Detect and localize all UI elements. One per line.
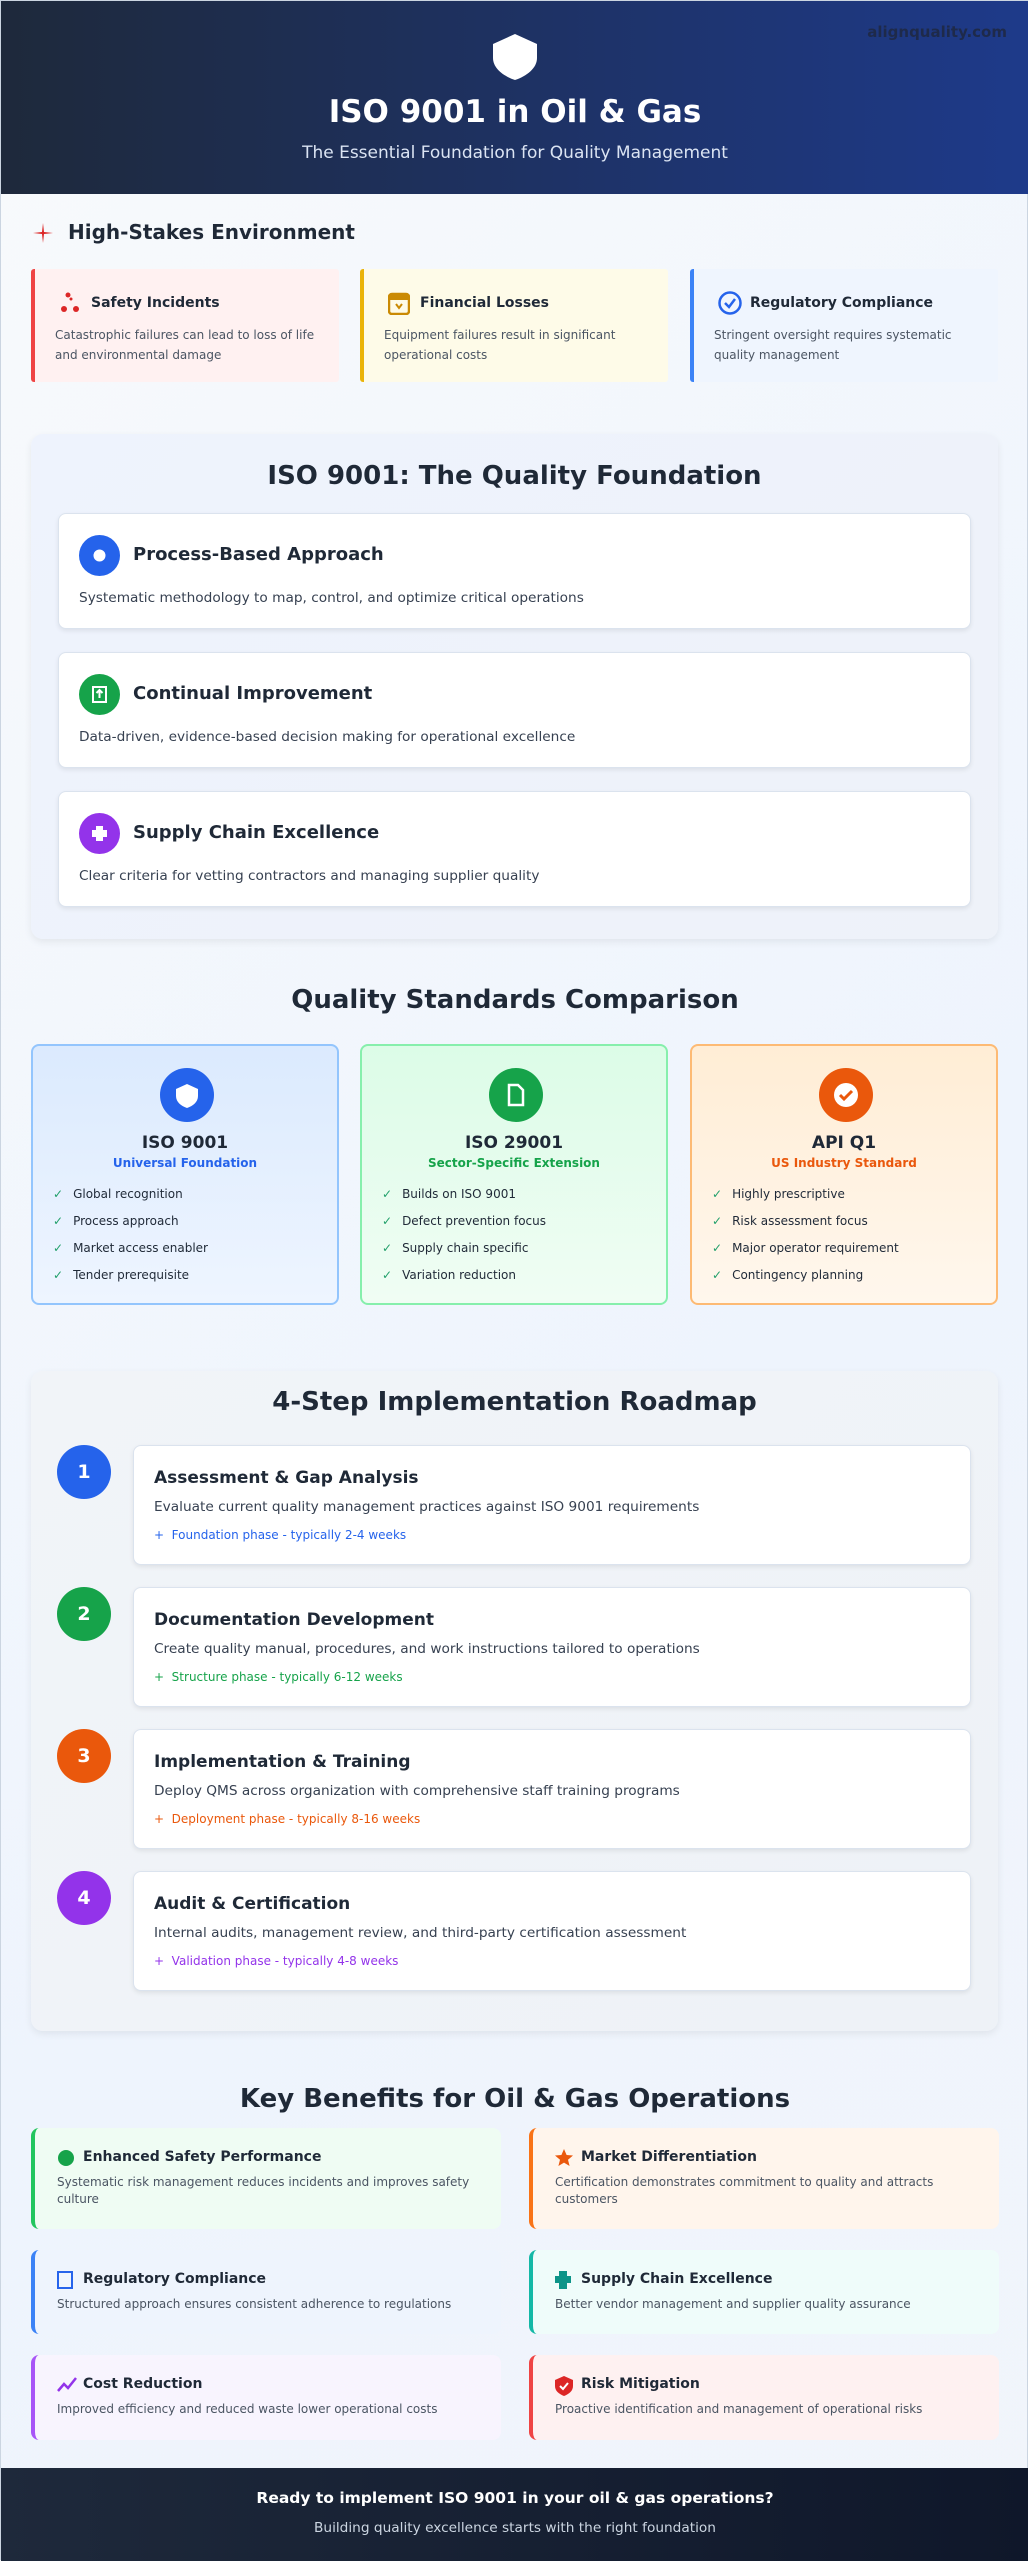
card: supply chain excellence: Clear criteria for vetting contractors and managing supplier quality (79, 868, 539, 884)
card: continual improvement: Continual Improvement (133, 683, 372, 704)
step 2 (57, 1587, 111, 1641)
card: API Q1: ✓ Major operator requirement (712, 1241, 899, 1255)
step 3: 3 (77, 1745, 91, 1767)
benefit: safety: Systematic risk management reduces incidents and improves safety culture (57, 2175, 469, 2206)
text: Assessment & Gap Analysis (154, 1468, 419, 1488)
step 4 (57, 1871, 111, 1925)
benefit: safety: Enhanced Safety Performance (83, 2149, 321, 2165)
benefit: cost: Cost Reduction (83, 2376, 202, 2392)
step 1: 1 (77, 1461, 91, 1483)
card: supply chain excellence: Supply Chain Excellence (133, 822, 379, 843)
card: ISO 9001: ✓ Process approach (53, 1214, 179, 1228)
benefit: market: Certification demonstrates commitment to quality and attracts customers (555, 2175, 933, 2206)
card: ISO 29001: Sector-Specific Extension (428, 1156, 600, 1170)
card: financial losses (360, 269, 668, 382)
subtitle: The Essential Foundation for Quality Management (302, 143, 728, 163)
card: regulatory compliance: Regulatory Compliance (750, 295, 933, 311)
card: safety incidents: Catastrophic failures can lead to loss of life and environmental damage (55, 328, 314, 362)
card: API Q1: US Industry Standard (771, 1156, 917, 1170)
card: ISO 29001: ISO 29001 (465, 1133, 563, 1153)
card: regulatory compliance: Stringent oversight requires systematic quality management (714, 328, 952, 362)
heading: roadmap: 4-Step Implementation Roadmap (272, 1387, 757, 1417)
text: Implementation & Training (154, 1752, 411, 1772)
heading: foundation: ISO 9001: The Quality Foundation (267, 461, 762, 491)
card: API Q1 (690, 1044, 998, 1305)
card: regulatory compliance (690, 269, 998, 382)
text: + Foundation phase - typically 2-4 weeks (154, 1528, 406, 1542)
card: supply chain excellence (58, 791, 971, 907)
card: safety incidents: Safety Incidents (91, 295, 220, 311)
benefit: safety (31, 2128, 501, 2229)
benefit: risk: Risk Mitigation (581, 2376, 700, 2392)
benefit: risk: Proactive identification and management of operational risks (555, 2402, 922, 2416)
benefit: market (529, 2128, 999, 2229)
card: process-based approach: Process-Based Approach (133, 544, 384, 565)
card: safety incidents (31, 269, 339, 382)
text: Internal audits, management review, and third-party certification assessment (154, 1925, 686, 1941)
text: Evaluate current quality management practices against ISO 9001 requirements (154, 1499, 699, 1515)
card: ISO 29001: ✓ Variation reduction (382, 1268, 516, 1282)
footer (1, 2468, 1028, 2561)
panel: roadmap (31, 1371, 998, 2031)
card: ISO 9001: ✓ Global recognition (53, 1187, 183, 1201)
panel: quality foundation (31, 434, 998, 939)
card: ISO 9001 (31, 1044, 339, 1305)
benefit: market: Market Differentiation (581, 2149, 757, 2165)
card: financial losses: Equipment failures result in significant operational costs (384, 328, 615, 362)
text: Documentation Development (154, 1610, 434, 1630)
heading: comparison: Quality Standards Comparison (291, 985, 739, 1015)
step 3 (57, 1729, 111, 1783)
step 1 (57, 1445, 111, 1499)
benefit: regulatory (31, 2250, 501, 2334)
footer title: Ready to implement ISO 9001 in your oil & gas operations? (256, 2489, 774, 2507)
card: ISO 9001: ✓ Market access enabler (53, 1241, 208, 1255)
text: + Validation phase - typically 4-8 weeks (154, 1954, 398, 1968)
card: ISO 9001: Universal Foundation (113, 1156, 257, 1170)
watermark: alignquality.com (867, 23, 1007, 41)
card: ISO 29001: ✓ Builds on ISO 9001 (382, 1187, 516, 1201)
text: + Deployment phase - typically 8-16 weeks (154, 1812, 420, 1826)
footer subtitle: Building quality excellence starts with the right foundation (314, 2520, 716, 2536)
benefit: cost (31, 2355, 501, 2440)
benefit: cost: Improved efficiency and reduced waste lower operational costs (57, 2402, 437, 2416)
step 2: 2 (77, 1603, 91, 1625)
card: continual improvement (58, 652, 971, 768)
card: process-based approach (58, 513, 971, 629)
card: API Q1: API Q1 (812, 1133, 876, 1153)
card: ISO 9001: ISO 9001 (142, 1133, 228, 1153)
card: ISO 9001: ✓ Tender prerequisite (53, 1268, 189, 1282)
card: ISO 29001 (360, 1044, 668, 1305)
card: ISO 29001: ✓ Supply chain specific (382, 1241, 528, 1255)
benefit: supply chain: Better vendor management and supplier quality assurance (555, 2297, 911, 2311)
icon: shield (493, 34, 537, 80)
card: API Q1: ✓ Contingency planning (712, 1268, 863, 1282)
title: ISO 9001 in Oil & Gas (329, 94, 701, 130)
header (1, 1, 1028, 194)
benefit: supply chain (529, 2250, 999, 2334)
card: ISO 29001: ✓ Defect prevention focus (382, 1214, 546, 1228)
card: process-based approach: Systematic methodology to map, control, and optimize critical operations (79, 590, 584, 606)
step 4: 4 (77, 1887, 91, 1909)
card: financial losses: Financial Losses (420, 295, 549, 311)
heading: benefits: Key Benefits for Oil & Gas Operations (240, 2084, 790, 2114)
benefit: supply chain: Supply Chain Excellence (581, 2271, 772, 2287)
card: API Q1: ✓ Highly prescriptive (712, 1187, 845, 1201)
text: Deploy QMS across organization with comprehensive staff training programs (154, 1783, 680, 1799)
benefit: regulatory: Regulatory Compliance (83, 2271, 266, 2287)
text: Audit & Certification (154, 1894, 350, 1914)
card: API Q1: ✓ Risk assessment focus (712, 1214, 868, 1228)
benefit: regulatory: Structured approach ensures consistent adherence to regulations (57, 2297, 451, 2311)
text: + Structure phase - typically 6-12 weeks (154, 1670, 403, 1684)
text: Create quality manual, procedures, and work instructions tailored to operations (154, 1641, 700, 1657)
benefit: risk (529, 2355, 999, 2440)
card: continual improvement: Data-driven, evidence-based decision making for operational excellence (79, 729, 575, 745)
icon: sparkle (33, 223, 53, 243)
heading: high-stakes: High-Stakes Environment (68, 220, 355, 244)
